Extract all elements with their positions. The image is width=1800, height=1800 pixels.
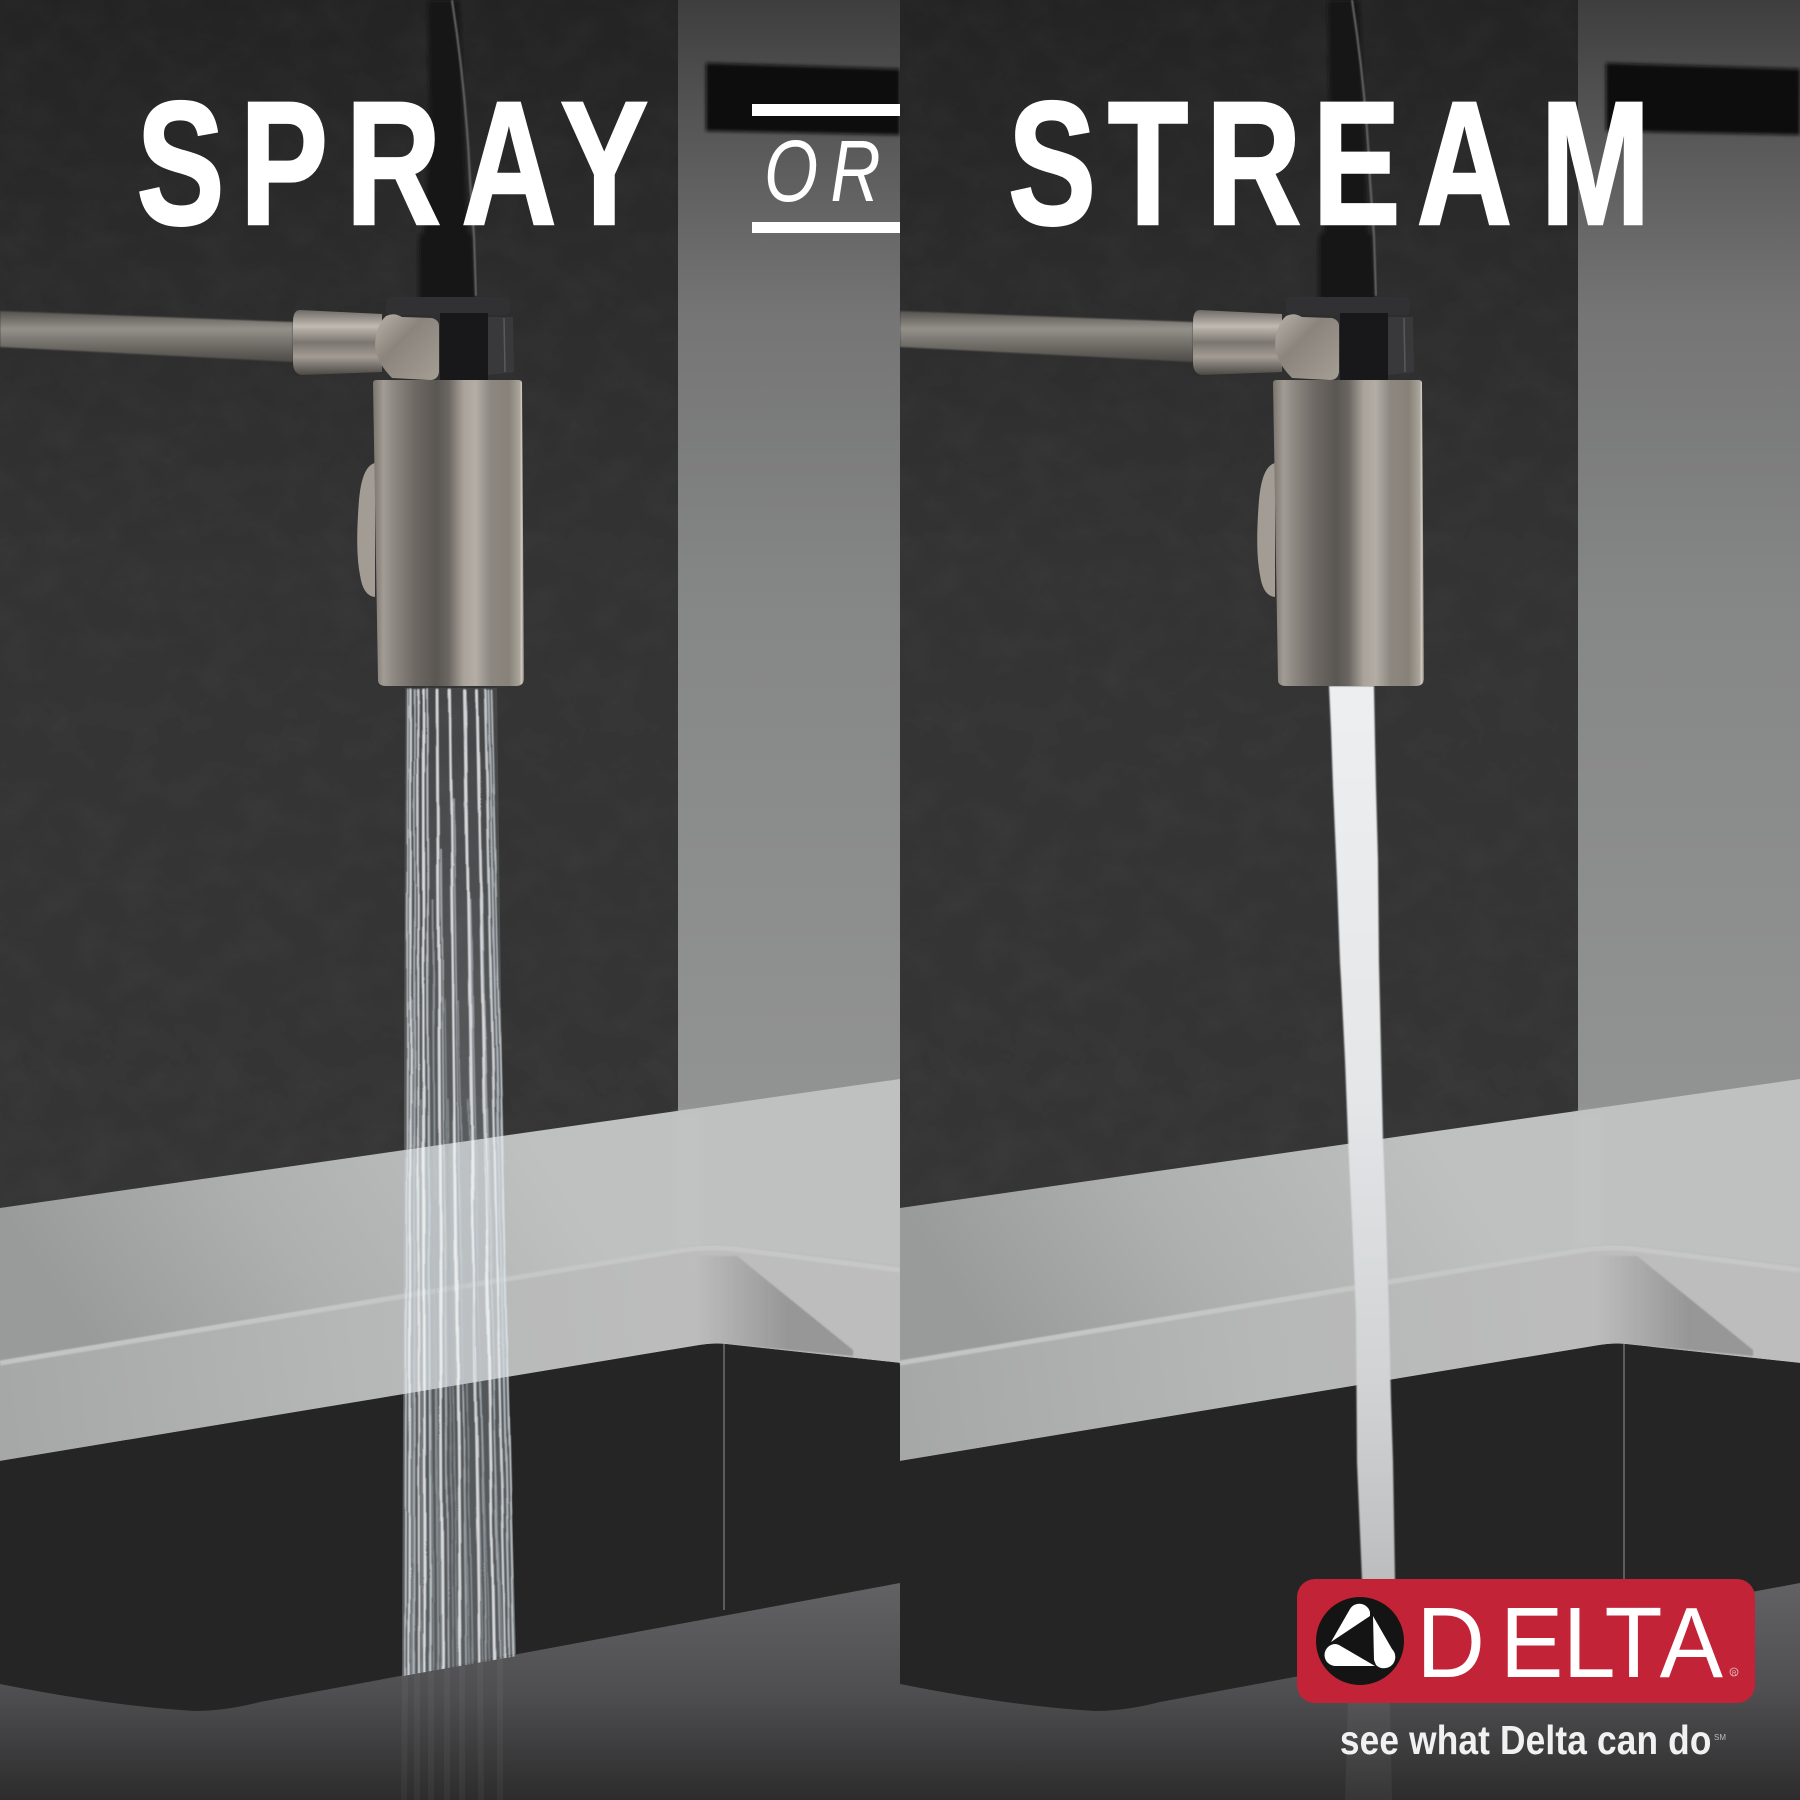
sink basin bbox=[0, 1344, 900, 1715]
spray button bbox=[357, 463, 375, 597]
red badge bbox=[1297, 1579, 1755, 1703]
solid water stream bbox=[1329, 686, 1395, 1580]
heading: spray: SPRAY bbox=[136, 64, 648, 261]
pipe coupler bbox=[293, 310, 382, 375]
bottom rule bbox=[752, 222, 900, 233]
black wall shelf bbox=[706, 63, 900, 135]
panel: spray scene backdrop bbox=[0, 0, 900, 1800]
counter corner shadow bbox=[695, 1256, 853, 1356]
top petal bbox=[1331, 1604, 1370, 1642]
right petal bbox=[1373, 1616, 1395, 1668]
spray streaks bbox=[405, 690, 515, 1690]
counter edge highlight bbox=[0, 1248, 900, 1363]
light grey wall bbox=[678, 0, 900, 1120]
elbow bbox=[375, 314, 439, 380]
heading: or with rules bbox=[752, 104, 900, 233]
reflective foreground ledge bbox=[0, 1583, 900, 1800]
dark textured wall bbox=[0, 0, 680, 1240]
side block edge bbox=[504, 318, 505, 372]
panel: stream scene backdrop bbox=[900, 0, 1800, 1800]
stream water column bbox=[1329, 686, 1395, 1800]
or label: OR bbox=[764, 123, 881, 220]
registered letter: R bbox=[1732, 1671, 1737, 1677]
sink seam bbox=[723, 1344, 725, 1610]
registered mark bbox=[1730, 1668, 1738, 1677]
bottom petal bbox=[1325, 1644, 1375, 1666]
stream reflection bbox=[1345, 1700, 1392, 1800]
hose highlight bbox=[452, 0, 476, 296]
registered ring bbox=[1730, 1668, 1738, 1676]
countertop surface bbox=[0, 1079, 900, 1365]
heading: stream: STREAM bbox=[1008, 64, 1650, 261]
spray haze bbox=[402, 688, 516, 1676]
counter front edge bbox=[0, 1244, 900, 1461]
faint spray reflection bbox=[404, 1659, 500, 1800]
counter soft vertical reflection bbox=[676, 1112, 702, 1246]
pipe arm bbox=[0, 311, 293, 362]
black disc bbox=[1316, 1597, 1404, 1685]
spray water pattern bbox=[402, 688, 516, 1676]
hose bbox=[419, 0, 476, 300]
service mark: SM bbox=[1714, 1733, 1726, 1742]
Delta logo bbox=[1297, 1579, 1755, 1703]
coupler groove bbox=[330, 311, 334, 373]
dark center block bbox=[440, 313, 488, 385]
collar bbox=[386, 297, 510, 315]
faucet: stream side bbox=[900, 0, 1424, 686]
top rule bbox=[752, 104, 900, 116]
faucet: spray side bbox=[0, 0, 524, 686]
tagline: see what Delta can do bbox=[1340, 1718, 1711, 1764]
wall texture bbox=[0, 0, 678, 1230]
sprayer body bbox=[373, 380, 524, 686]
wordmark: DELTA bbox=[1416, 1587, 1723, 1699]
dark side block bbox=[488, 317, 514, 375]
icon: delta triangle mark bbox=[1316, 1597, 1404, 1685]
